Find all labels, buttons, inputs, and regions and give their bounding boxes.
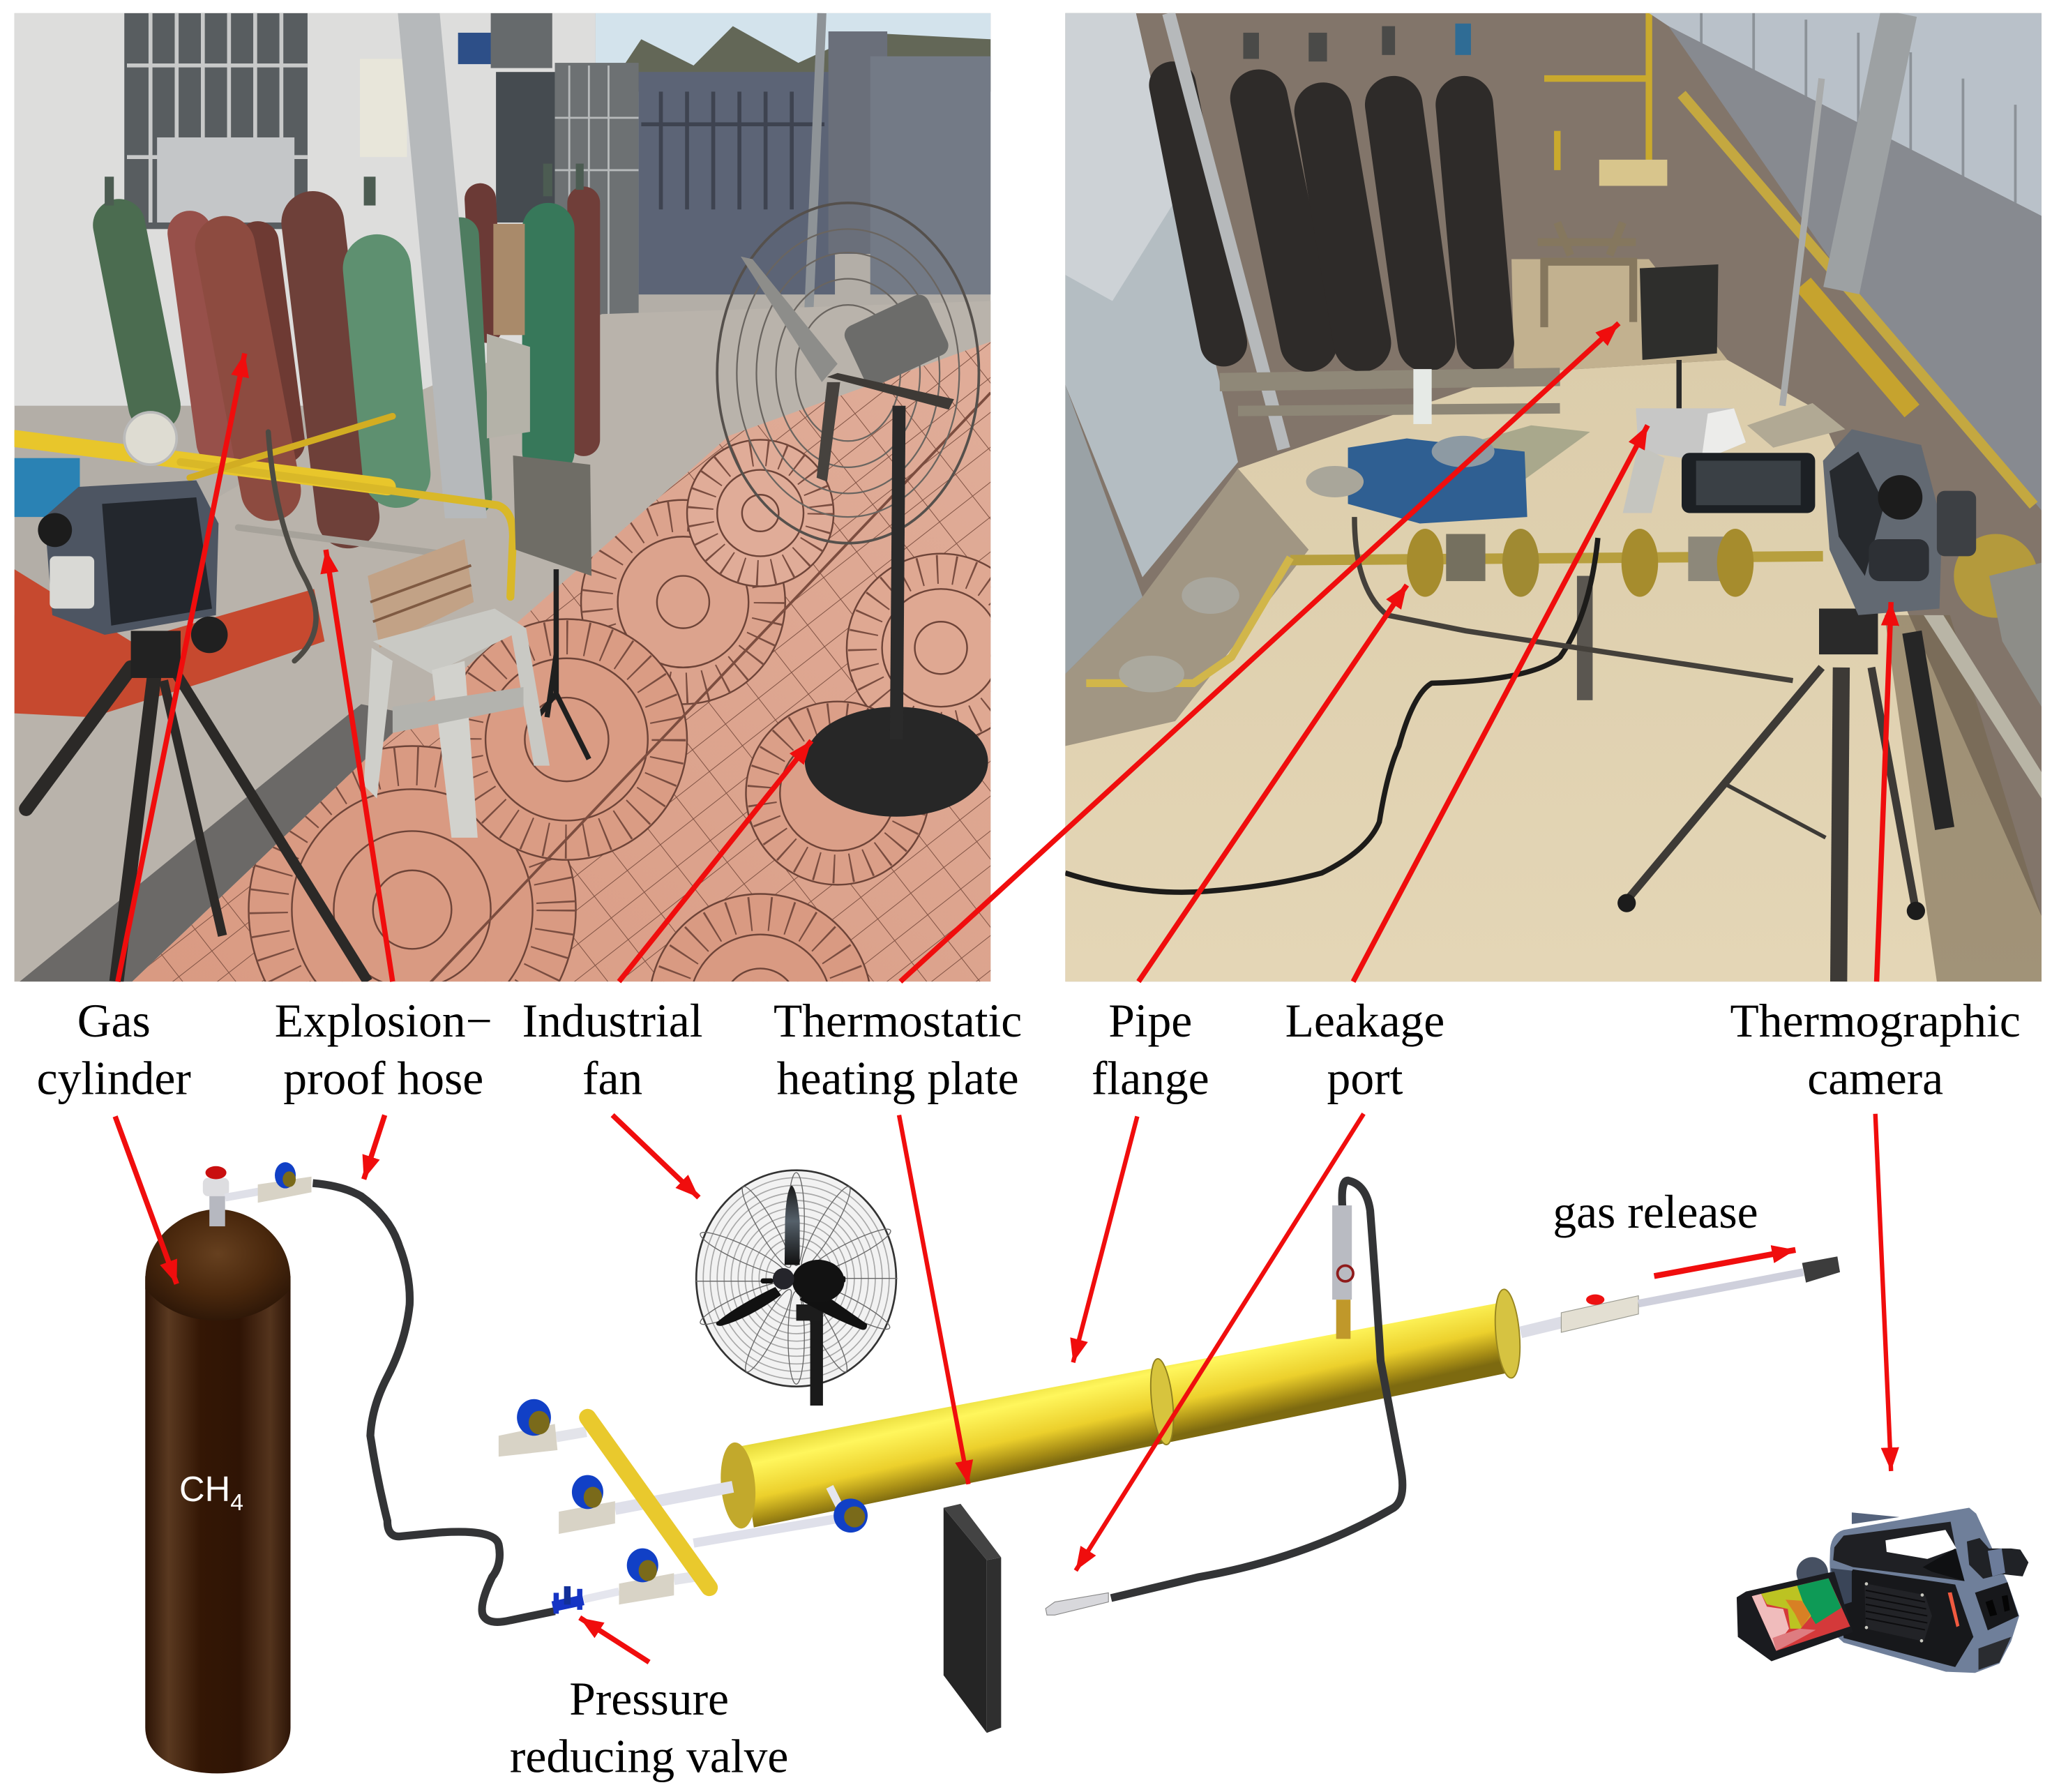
right side flange and pipe [1885, 534, 2042, 981]
label: thermostatic heating plate: heating plate [777, 1053, 1019, 1105]
label: pressure reducing valve: Pressure [569, 1673, 729, 1725]
diagram: thermostatic heating plate [944, 1504, 1001, 1733]
arrow: to hose [364, 1115, 385, 1180]
label: pipe flange: Pipe [1108, 995, 1192, 1047]
labels row [37, 995, 2021, 1105]
black heating plate [1640, 264, 1719, 360]
label: leakage port: port [1327, 1053, 1403, 1105]
black gas cylinders [1172, 85, 1486, 343]
flanged pipe [1086, 529, 1823, 700]
yellow gas pipes [15, 412, 513, 661]
label: pipe flange: flange [1092, 1053, 1209, 1105]
thermographic camera on tripod [27, 481, 368, 981]
gas cylinders [119, 199, 584, 517]
label: leakage port: Leakage [1285, 995, 1444, 1047]
stool with bricks [364, 539, 550, 838]
arrow: gas cylinder photo [118, 354, 245, 981]
diagram: cylinder valve [203, 1162, 312, 1226]
arrow: to camera [1876, 1114, 1891, 1471]
arrow: to flange [1073, 1116, 1137, 1362]
arrow: to cylinder [115, 1116, 176, 1284]
arrow: leakage port photo [1353, 426, 1647, 981]
stool [1623, 408, 1746, 513]
label: industrial fan: Industrial [522, 995, 703, 1047]
black hose [1065, 538, 1598, 892]
label: thermostatic heating plate: Thermostatic [774, 995, 1022, 1047]
diagram: gas release outlet [1521, 1256, 1840, 1332]
arrow: to pressure valve [580, 1618, 649, 1662]
label: gas cylinder: Gas [77, 995, 151, 1047]
metal pole [398, 13, 487, 518]
arrow: thermographic camera photo [1877, 602, 1891, 981]
arrow: thermostatic heating plate photo [900, 323, 1619, 981]
diagram arrows [115, 1114, 1891, 1662]
background pipes and stand [1220, 13, 2034, 505]
camera thermal screen [1752, 1579, 1850, 1651]
metal plate on tripod [513, 455, 591, 759]
diagram: thermographic camera [1737, 1508, 2028, 1673]
arrow: pipe flange photo [1138, 585, 1407, 981]
arrow: to fan [612, 1115, 699, 1198]
label: gas cylinder: cylinder [37, 1053, 191, 1105]
diagram: explosion-proof hose [312, 1183, 555, 1622]
arrow: to plate [899, 1115, 968, 1484]
label: thermographic camera: camera [1807, 1053, 1943, 1105]
label: thermographic camera: Thermographic [1730, 995, 2021, 1047]
panel: right site photo [1065, 13, 2042, 981]
thermographic camera on tripod [1617, 429, 1976, 981]
arrows on photos and labels [118, 323, 1891, 981]
arrow: explosion-proof hose photo [326, 550, 393, 981]
label: pressure reducing valve: reducing valve [510, 1730, 788, 1782]
label: gas release: gas release [1553, 1186, 1758, 1238]
diagram: methane cylinder [145, 1210, 291, 1773]
diagram: industrial fan [695, 1170, 898, 1406]
label: explosion-proof hose: proof hose [283, 1053, 483, 1105]
brick paving pattern [148, 342, 990, 982]
label: explosion-proof hose: Explosion− [275, 995, 492, 1047]
arrow: industrial fan photo [619, 741, 811, 981]
blue valve actuator [1306, 436, 1527, 524]
diagram: yellow pipe [718, 1288, 1523, 1530]
cylinder formula: CH [179, 1469, 230, 1509]
diagram: pressure reducing valve [552, 1586, 619, 1613]
arrow: gas release direction [1654, 1250, 1795, 1276]
diagram: leakage sensor and hose [1046, 1180, 1403, 1615]
cylinder formula: 4 [230, 1489, 243, 1516]
diagram: gas manifold with outlets [499, 1399, 868, 1604]
industrial fan [717, 203, 988, 817]
panel: left site photo [14, 13, 990, 982]
label: industrial fan: fan [582, 1053, 642, 1105]
arrow: to leakage port [1076, 1114, 1364, 1571]
